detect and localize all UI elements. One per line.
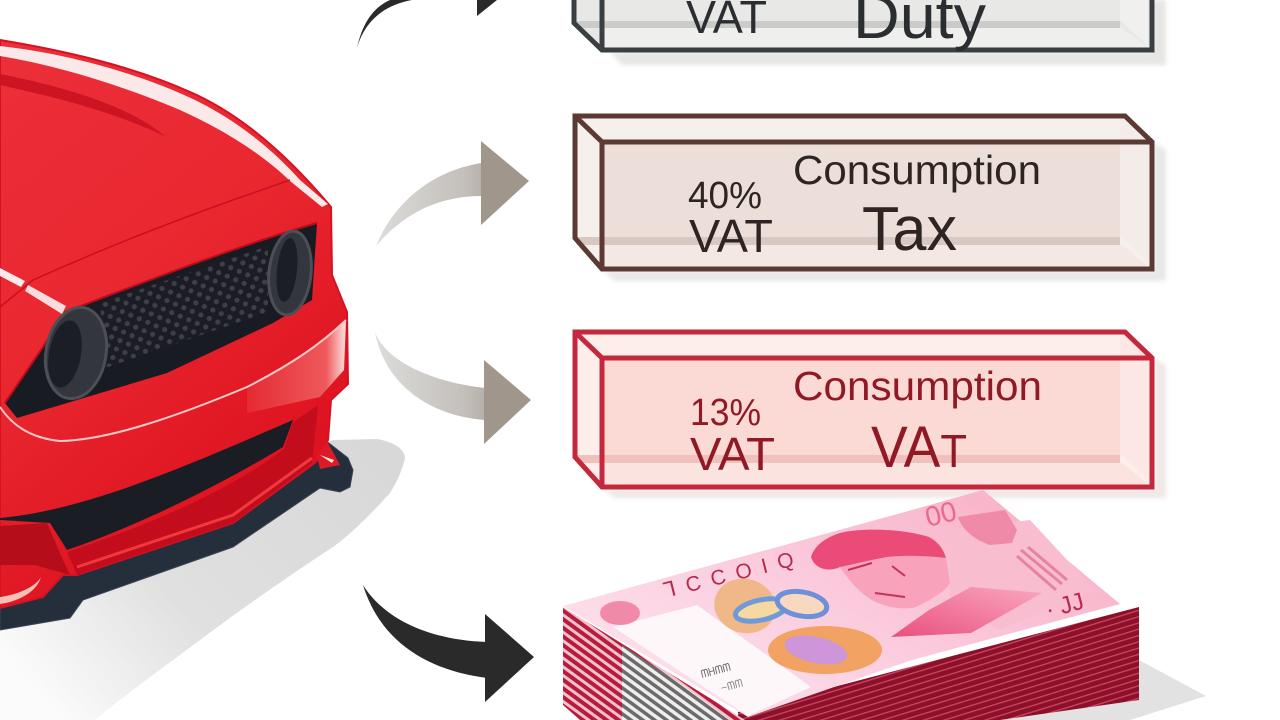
VAT label: VAT	[690, 428, 775, 480]
portrait backdrop	[950, 520, 1095, 630]
icon: yuan banknote stack	[563, 490, 1206, 720]
white watermark panel	[613, 605, 811, 716]
VAT box frame	[575, 332, 1152, 487]
corner mark: · JJ	[1043, 588, 1087, 624]
lower air intake	[0, 420, 293, 550]
left headlight ring	[38, 302, 114, 404]
orange medallion	[768, 626, 882, 674]
bumper highlight	[0, 320, 346, 441]
hood seam line	[0, 180, 290, 307]
VAT box lower floor	[604, 463, 1148, 484]
car body	[0, 40, 348, 608]
arrow: black to cash	[363, 585, 534, 702]
corner glint	[320, 455, 334, 463]
portrait hair	[811, 530, 946, 570]
grille rim	[5, 223, 317, 403]
40% label: 40%	[688, 175, 762, 217]
panel: duty box	[574, 0, 1166, 65]
VAT box floor shade	[577, 455, 1120, 463]
arrow: grey to VAT	[375, 332, 531, 444]
VAT box right bevel	[1120, 336, 1149, 480]
fender highlight left	[0, 268, 25, 287]
portrait shoulders	[891, 587, 1042, 637]
grille opening	[5, 223, 317, 418]
side reflection	[0, 577, 41, 604]
tax box floor shade	[577, 237, 1120, 245]
tiny note text line 1: ᗰᕼᗰᗰ	[700, 661, 732, 681]
corner fog panel	[0, 523, 70, 575]
top-right emblem	[958, 510, 1017, 545]
tax box lower floor	[604, 245, 1148, 266]
ground shadow	[0, 439, 405, 720]
stack left grey portion	[622, 645, 730, 720]
13% label: 13%	[690, 392, 761, 434]
panel: consumption tax box	[575, 116, 1166, 281]
tax box front face	[604, 144, 1120, 237]
lower lip	[67, 405, 318, 575]
panel: consumption VAT box	[575, 332, 1166, 498]
hatched lines	[1017, 547, 1067, 590]
right headlight ring	[265, 229, 315, 317]
blue ring rosette left	[733, 595, 789, 625]
right headlight inner	[274, 237, 300, 303]
VAT box shadow	[602, 358, 1166, 498]
gold rosette	[708, 572, 782, 640]
duty box floor shade	[577, 21, 1120, 28]
Consumption label: Consumption	[793, 147, 1041, 193]
Consumption label: Consumption	[793, 363, 1042, 409]
arrow: top black	[357, 0, 497, 48]
small left emblem	[600, 601, 640, 625]
tax box right bevel	[1120, 120, 1149, 262]
arrow: grey to consumption tax	[376, 141, 529, 246]
left headlight inner	[43, 318, 87, 390]
duty box lower floor	[604, 27, 1150, 48]
fender highlight right	[25, 285, 66, 314]
VAT box front face	[604, 360, 1120, 456]
mesh grille	[100, 246, 268, 368]
stack right side	[738, 607, 1139, 720]
VAT box fill	[575, 332, 1152, 487]
corner accent	[317, 441, 340, 469]
VAT large label: VAT	[871, 415, 967, 480]
hood crease	[0, 74, 166, 137]
portrait face	[840, 556, 950, 608]
tax box frame	[575, 116, 1152, 269]
duty box right bevel	[1120, 0, 1148, 46]
hood highlight	[0, 46, 328, 207]
lilac medallion centre	[782, 631, 850, 669]
duty box frame	[574, 0, 1152, 50]
VAT label: VAT	[689, 210, 773, 262]
car with ground shadow	[0, 40, 405, 720]
stack shadow	[1000, 660, 1206, 720]
banknote top face	[563, 490, 1120, 717]
lip edge highlight	[77, 458, 312, 567]
Tax label: Tax	[862, 195, 957, 264]
stack left side	[563, 607, 745, 720]
duty box shadow	[610, 0, 1166, 65]
tax box shadow	[602, 142, 1166, 281]
front splitter	[0, 440, 353, 630]
duty box fill	[574, 0, 1152, 50]
tiny note text line 2: ~ᗰᗰ	[720, 678, 744, 695]
denomination 100: 00	[922, 495, 960, 533]
serial text: ᒣCCOIQ	[661, 548, 796, 603]
bumper pale patch	[247, 321, 346, 413]
tax box fill	[575, 116, 1152, 269]
blue ring rosette right	[775, 588, 829, 620]
portrait eyes and mouth	[848, 563, 905, 597]
